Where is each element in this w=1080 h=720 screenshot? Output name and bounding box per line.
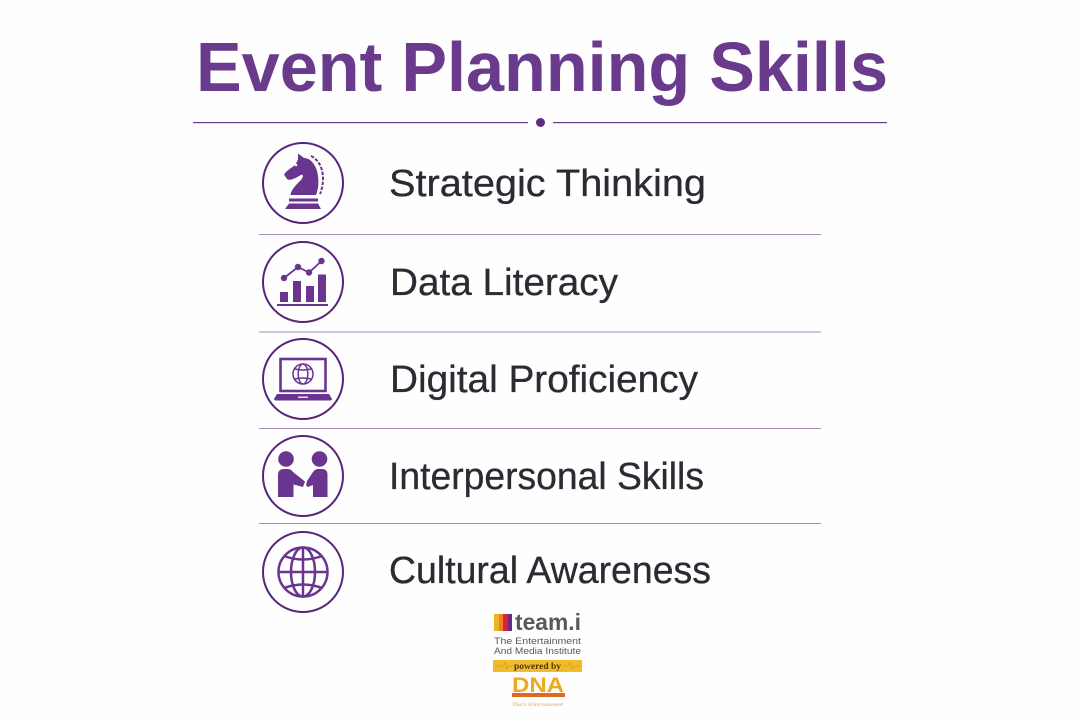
- title: Event Planning Skills: [196, 28, 888, 106]
- skill row: Cultural Awareness: [263, 532, 711, 612]
- logo tagline: The Entertainment: [494, 636, 582, 646]
- DNA logo: DNA: [512, 674, 564, 697]
- row divider: [259, 428, 821, 429]
- icon: laptop with globe: [263, 339, 343, 419]
- label: Data Literacy: [390, 262, 618, 304]
- logo band: powered by: [514, 661, 562, 671]
- title divider: [193, 118, 887, 127]
- skill row: Interpersonal Skills: [263, 436, 704, 516]
- DNA logo: [512, 674, 565, 708]
- DNA logo: That's Entertainment: [512, 703, 564, 708]
- label: Strategic Thinking: [389, 163, 706, 205]
- skill row: Data Literacy: [263, 242, 618, 322]
- logo: team.i powered by DNA: [493, 609, 582, 708]
- label: Interpersonal Skills: [389, 456, 704, 498]
- skill row: Strategic Thinking: [263, 143, 706, 223]
- icon: handshake: [263, 436, 343, 516]
- icon: bar chart with trend line: [263, 242, 343, 322]
- logo wordmark: team.i: [515, 609, 581, 635]
- icon: chess knight: [263, 143, 343, 223]
- icon: globe: [263, 532, 343, 612]
- row divider: [259, 523, 821, 524]
- logo mark: [494, 614, 512, 631]
- label: Cultural Awareness: [389, 550, 711, 592]
- skill row: Digital Proficiency: [263, 339, 698, 419]
- logo: team.i powered by DNA: And Media Institute: [494, 646, 581, 656]
- label: Digital Proficiency: [390, 359, 698, 401]
- row divider: [259, 234, 821, 235]
- row divider: [259, 332, 821, 333]
